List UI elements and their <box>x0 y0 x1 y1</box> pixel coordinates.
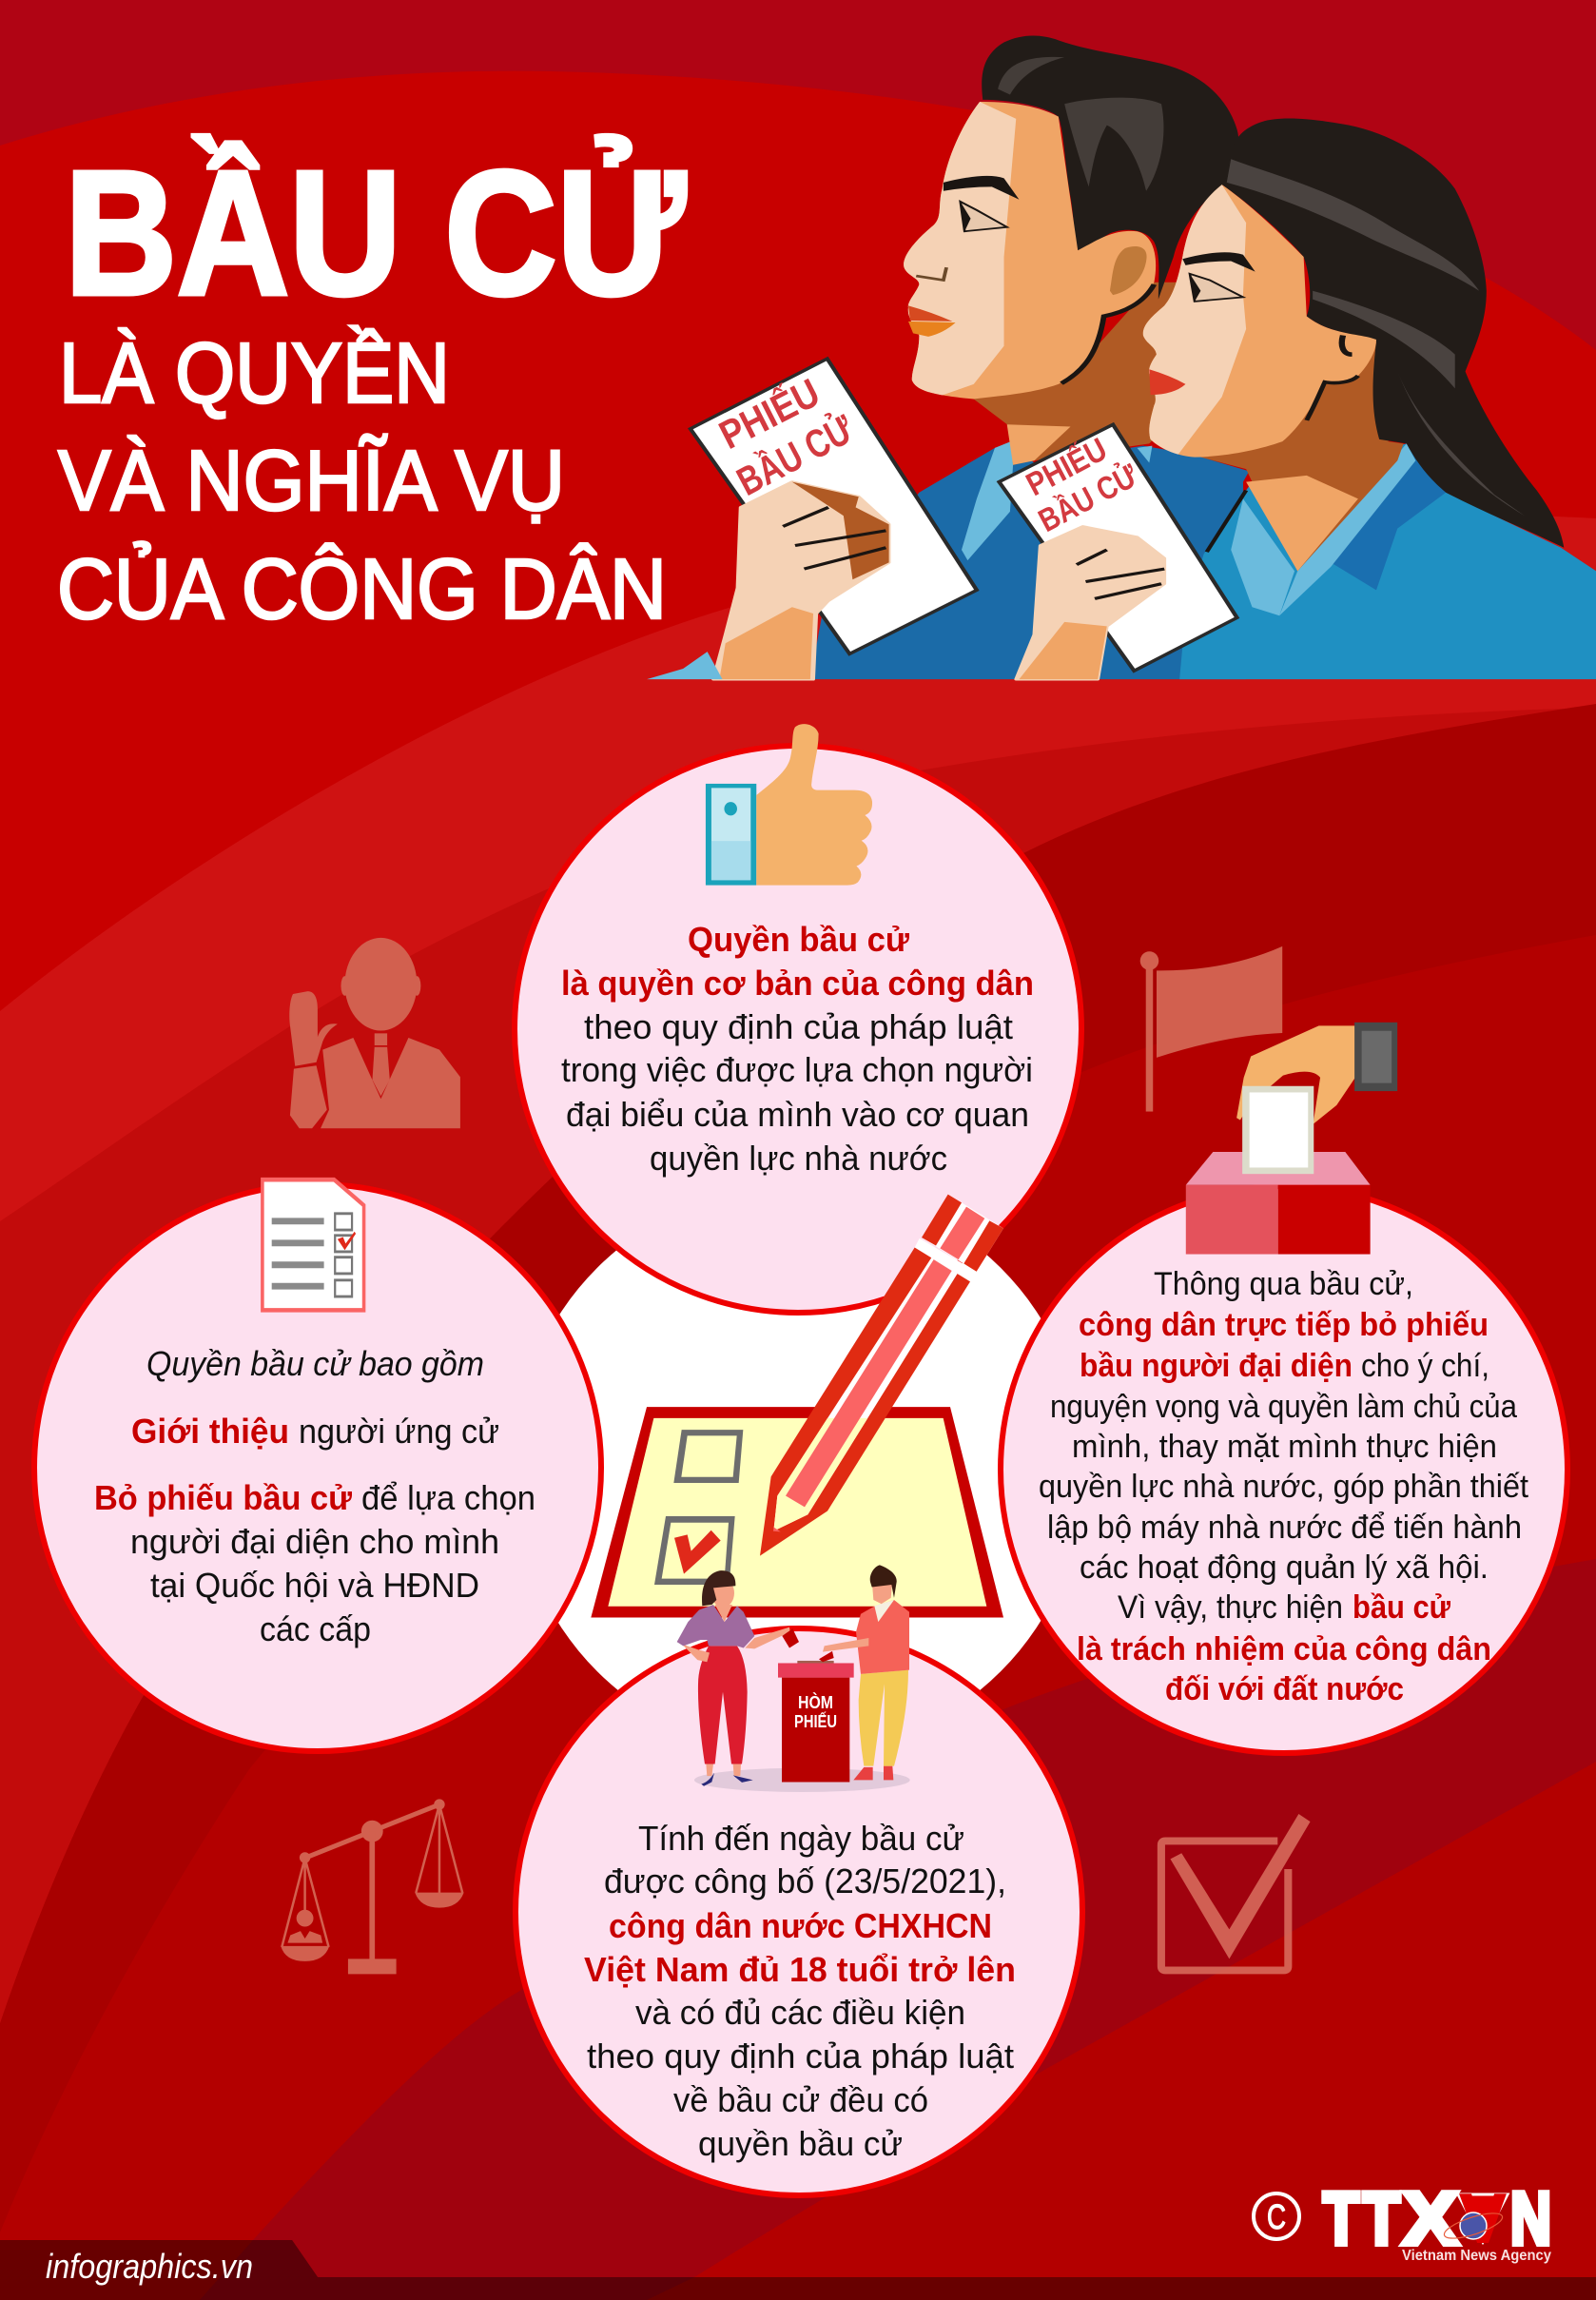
left circle text: Giới thiệu <box>131 1412 289 1451</box>
logo: copyright mark: C <box>1267 2197 1286 2236</box>
left circle text: các cấp <box>260 1609 371 1648</box>
left circle text: Bỏ phiếu bầu cử <box>94 1478 353 1517</box>
right circle text: đối với đất nước <box>1165 1671 1404 1707</box>
top circle text: trong việc được lựa chọn người <box>561 1050 1033 1089</box>
right circle text: quyền lực nhà nước, góp phần thiết <box>1039 1469 1529 1505</box>
man nose shadow and lips <box>908 267 956 337</box>
bottom circle text: Việt Nam đủ 18 tuổi trở lên <box>584 1950 1016 1989</box>
woman lips <box>1149 369 1185 395</box>
icon: flag, hand and ballot box <box>1140 946 1397 1255</box>
right circle text <box>1039 1266 1529 1707</box>
man eyebrow and eye <box>944 176 1019 231</box>
right circle text: công dân trực tiếp bỏ phiếu <box>1079 1307 1489 1343</box>
bottom circle text: theo quy định của pháp luật <box>587 2037 1014 2076</box>
top circle text: đại biểu của mình vào cơ quan <box>566 1095 1029 1134</box>
centre illustration: ballot, pencil and voters <box>591 1195 1003 1792</box>
pencil <box>760 1195 1003 1556</box>
left circle text <box>94 1344 535 1648</box>
logo: TTXVN: V <box>1460 2181 1506 2257</box>
icon: thumbs up <box>706 724 872 886</box>
logo: TTXVN: N <box>1510 2176 1551 2260</box>
right circle text: nguyện vọng và quyền làm chủ của <box>1050 1389 1517 1425</box>
woman face <box>1143 185 1376 458</box>
bottom circle text: được công bố (23/5/2021), <box>604 1861 1006 1900</box>
man hand <box>713 482 889 679</box>
right circle text: các hoạt động quản lý xã hội. <box>1080 1550 1489 1586</box>
bottom circle text: Tính đến ngày bầu cử <box>638 1819 964 1858</box>
bottom circle text: và có đủ các điều kiện <box>635 1993 965 2032</box>
woman ballot text line 1: PHIẾU <box>1021 431 1113 503</box>
bottom circle text: công dân nước CHXHCN <box>609 1906 992 1945</box>
left circle text: Quyền bầu cử bao gồm <box>146 1344 484 1383</box>
logo: TTXVN: T <box>1323 2176 1359 2260</box>
logo: TTXVN: T <box>1363 2176 1400 2260</box>
box label line 2: PHIẾU <box>794 1711 837 1731</box>
title <box>57 135 687 637</box>
subtitle line 3: CỦA CÔNG DÂN <box>57 540 667 637</box>
right circle text: Vì vậy, thực hiện <box>1118 1589 1343 1626</box>
left circle text: tại Quốc hội và HĐND <box>150 1566 479 1605</box>
right circle text: lập bộ máy nhà nước để tiến hành <box>1047 1510 1522 1546</box>
bottom circle text: quyền bầu cử <box>698 2124 903 2163</box>
woman shirt <box>1179 443 1596 679</box>
right circle text: mình, thay mặt mình thực hiện <box>1072 1429 1497 1465</box>
man ballot <box>691 359 977 653</box>
top circle text: là quyền cơ bản của công dân <box>561 964 1034 1003</box>
left circle text: để lựa chọn <box>361 1478 535 1517</box>
woman neck <box>1195 341 1404 571</box>
title main line: BẦU CỬ <box>65 135 687 332</box>
ballot sheet <box>591 1407 1003 1617</box>
bottom circle text: về bầu cử đều có <box>673 2080 928 2119</box>
voter: woman <box>677 1570 799 1786</box>
top circle text: Quyền bầu cử <box>688 920 910 959</box>
flag <box>1140 946 1282 1112</box>
man ballot text line 2: BẦU CỬ <box>730 405 861 504</box>
right circle text: bầu người đại diện <box>1080 1348 1353 1384</box>
top circle text: quyền lực nhà nước <box>650 1139 947 1178</box>
man ballot text line 1: PHIẾU <box>712 370 827 458</box>
icon: check box <box>1161 1814 1311 1970</box>
left circle text: người ứng cử <box>299 1412 499 1451</box>
right circle text: là trách nhiệm của công dân <box>1077 1631 1491 1667</box>
logo: copyright mark <box>1254 2193 1299 2239</box>
woman chest <box>1246 476 1358 571</box>
panel: bottom circle <box>516 1628 1082 2195</box>
voter: man <box>819 1565 909 1780</box>
woman hair <box>1222 119 1564 548</box>
icon: checklist document <box>263 1179 364 1310</box>
panel: left circle <box>34 1179 601 1751</box>
right circle text: bầu cử <box>1353 1589 1450 1626</box>
ground shadow <box>694 1768 910 1792</box>
man hair <box>982 36 1238 300</box>
panel: right circle <box>1001 1186 1567 1753</box>
man neck light <box>1007 424 1071 465</box>
logo: TTXVN: Vietnam News Agency <box>1402 2248 1551 2264</box>
man neck <box>974 283 1192 465</box>
illustration: man and woman holding ballots <box>647 36 1596 679</box>
subtitle line 1: LÀ QUYỀN <box>59 324 450 421</box>
logo: TTXVN: X <box>1403 2176 1458 2260</box>
panel: top circle <box>515 724 1081 1313</box>
box label line 1: HÒM <box>798 1692 833 1712</box>
ballot box <box>1186 1086 1371 1255</box>
logo: TTXVN <box>1323 2176 1551 2264</box>
woman hand <box>1016 526 1164 679</box>
white centre circle <box>514 1184 1084 1755</box>
left circle text: người đại diện cho mình <box>130 1522 499 1561</box>
woman ballot text line 2: BẦU CỬ <box>1033 458 1144 539</box>
bottom circle text <box>584 1819 1016 2163</box>
icon: scales <box>281 1799 464 1974</box>
man shirt <box>810 439 1249 679</box>
top circle text <box>561 920 1034 1178</box>
man sleeve <box>647 652 723 679</box>
footer band <box>0 2240 1596 2300</box>
right circle text: Thông qua bầu cử, <box>1154 1266 1413 1302</box>
woman eyebrow and eye <box>1182 252 1255 302</box>
ballot box <box>778 1661 854 1782</box>
footer site name: infographics.vn <box>46 2247 253 2286</box>
right circle text: cho ý chí, <box>1361 1348 1489 1384</box>
voting hand <box>1236 1023 1397 1124</box>
woman ballot <box>999 424 1237 671</box>
man face <box>904 102 1157 400</box>
icon: raised-hand person <box>289 938 460 1128</box>
subtitle line 2: VÀ NGHĨA VỤ <box>58 434 565 529</box>
top circle text: theo quy định của pháp luật <box>584 1007 1013 1046</box>
